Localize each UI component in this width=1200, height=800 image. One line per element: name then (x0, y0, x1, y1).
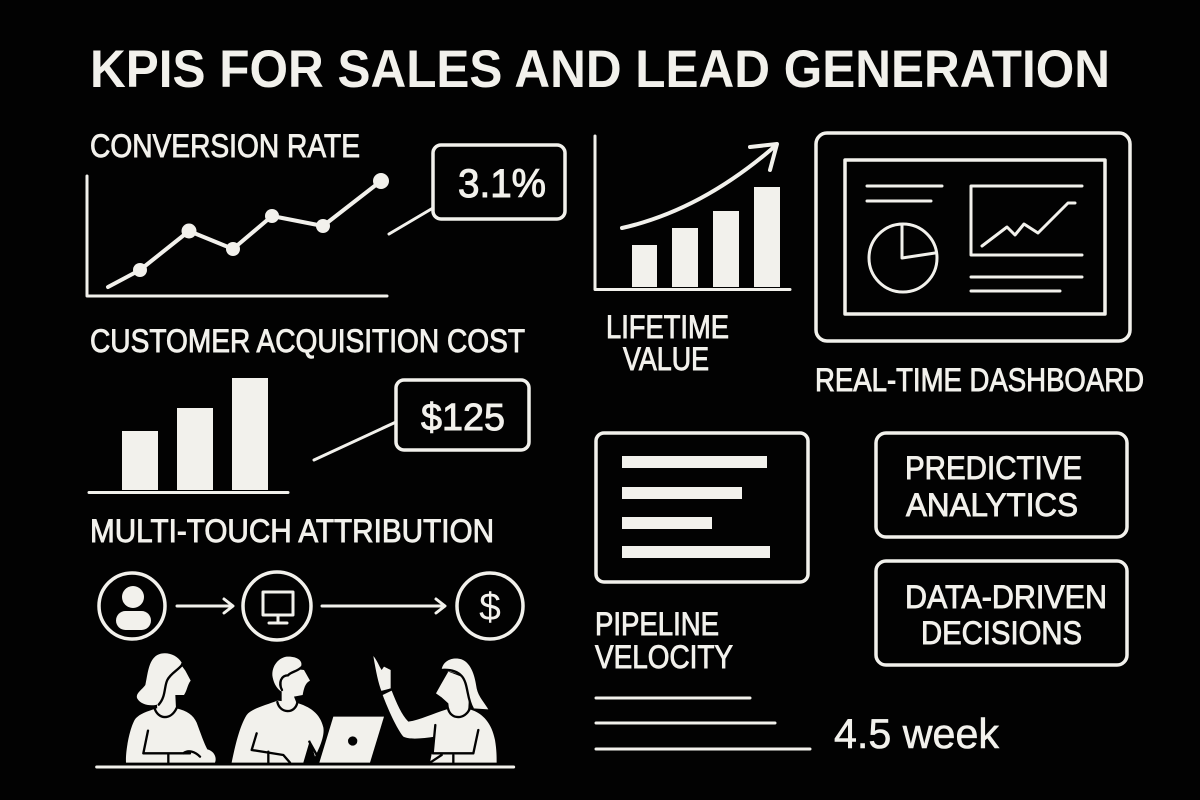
heading: pipeline velocity: PIPELINE (595, 606, 719, 642)
title: KPIS FOR SALES AND LEAD GENERATION (90, 40, 1110, 99)
heading: multi-touch attribution: MULTI-TOUCH ATTRIBUTION (90, 513, 494, 549)
heading: pipeline velocity: VELOCITY (595, 639, 733, 675)
heading: customer acquisition cost: CUSTOMER ACQUISITION COST (90, 323, 525, 359)
figure: middle man (232, 657, 324, 763)
icon: computer monitor (243, 572, 311, 640)
panel: pipeline velocity (595, 433, 1000, 757)
illustration: team at table with laptop (97, 653, 514, 767)
icon: dollar: $ (479, 586, 501, 629)
bar chart: lifetime value (595, 136, 790, 290)
callout: 3.1% (389, 145, 565, 234)
icon: pipeline list card (596, 433, 808, 582)
panel: multi-touch attribution (90, 513, 523, 767)
callout: $125: $125 (421, 397, 505, 439)
panel: customer acquisition cost (89, 323, 529, 492)
panel: data-driven decisions: DATA-DRIVEN (905, 579, 1107, 615)
panel: real-time dashboard (815, 133, 1144, 398)
arrow: screen to revenue (322, 599, 445, 613)
figure: left woman (126, 653, 216, 763)
heading: lifetime value: LIFETIME (606, 309, 729, 345)
icon: dollar (457, 573, 523, 639)
metric: 4.5 week: 4.5 week (834, 710, 1000, 757)
heading: pipeline velocity (595, 606, 733, 675)
panel: predictive analytics: PREDICTIVE (905, 450, 1082, 486)
velocity lines (596, 698, 810, 749)
table edge (97, 762, 514, 771)
panel: predictive analytics: ANALYTICS (906, 487, 1078, 523)
heading: conversion rate: CONVERSION RATE (90, 128, 360, 164)
callout: $125 (314, 380, 529, 460)
panel: lifetime value (595, 136, 790, 377)
icon: customer (99, 573, 165, 639)
icon: dashboard screen (816, 133, 1130, 341)
panel: conversion rate (87, 128, 565, 296)
panel: predictive analytics (876, 433, 1127, 537)
heading: real-time dashboard: REAL-TIME DASHBOARD (815, 362, 1144, 398)
bar chart: acquisition cost (89, 378, 288, 492)
callout: 3.1%: 3.1% (458, 162, 546, 206)
icon: laptop (319, 717, 384, 763)
figure: right woman with raised hand (373, 656, 497, 763)
heading: lifetime value (606, 309, 729, 377)
panel: data-driven decisions: DECISIONS (921, 615, 1082, 651)
line chart: conversion rate (87, 173, 389, 296)
arrow: customer to screen (177, 599, 233, 613)
panel: data-driven decisions (876, 561, 1127, 665)
heading: lifetime value: VALUE (623, 341, 709, 377)
